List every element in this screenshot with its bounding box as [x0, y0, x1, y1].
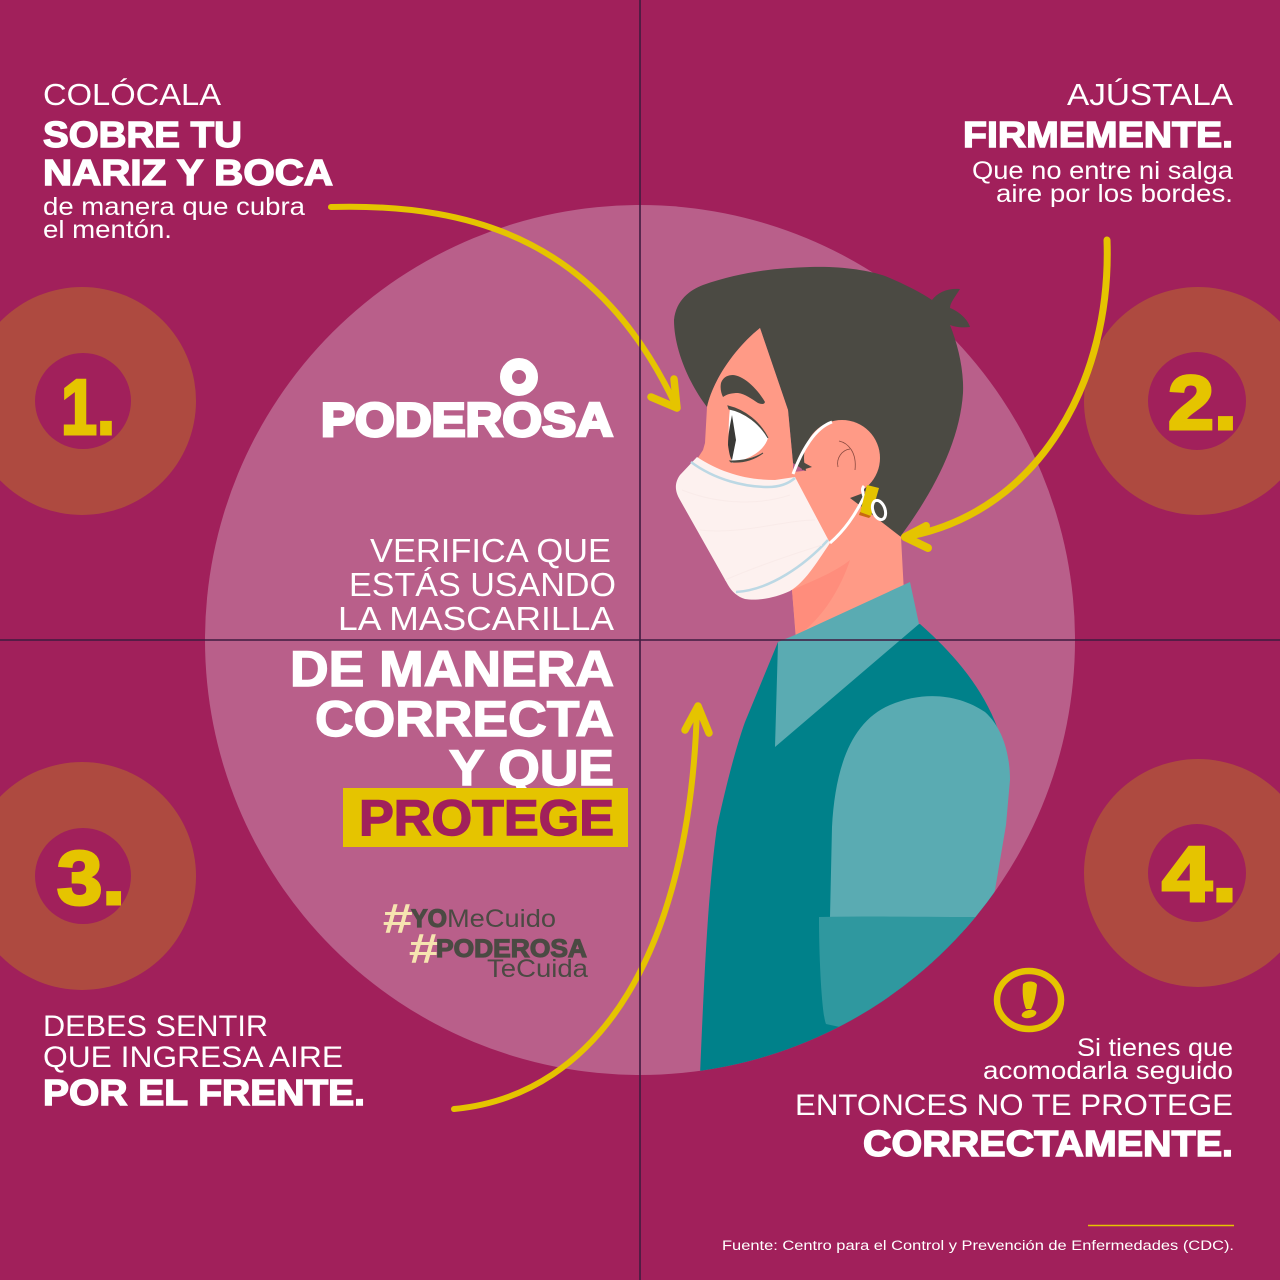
badge: step 4 [1084, 759, 1280, 987]
central message: PROTEGE [359, 790, 614, 846]
pocket [819, 916, 976, 1027]
arrow: upward to mask front [454, 706, 709, 1109]
text block: step 2: AJÚSTALA [1067, 77, 1233, 112]
shirt torso [700, 624, 1010, 1100]
text block: step 4: ENTONCES NO TE PROTEGE [795, 1089, 1233, 1122]
badge: step 3: 3. [57, 836, 125, 921]
text block: step 1: el mentón. [43, 216, 172, 244]
arrow: to back of neck [905, 240, 1107, 548]
hashtags: # [382, 895, 413, 942]
eye [728, 406, 768, 463]
text block: step 3: POR EL FRENTE. [43, 1072, 365, 1113]
text block: step 3 [43, 1010, 365, 1113]
text block: step 2: FIRMEMENTE. [963, 114, 1233, 155]
text block: step 1 [43, 77, 333, 244]
text block: step 1: de manera que cubra [43, 193, 305, 221]
text block: step 2: aire por los bordes. [996, 180, 1233, 208]
text block: step 3: QUE INGRESA AIRE [43, 1041, 343, 1074]
text block: step 4: Si tienes que [1077, 1034, 1233, 1062]
central message: VERIFICA QUE [370, 532, 611, 569]
hashtags: MeCuido [447, 905, 556, 933]
central message: Y QUE [449, 740, 614, 796]
mask [676, 457, 830, 600]
text block: step 1: NARIZ Y BOCA [43, 152, 333, 193]
hashtags: # [408, 925, 439, 972]
central circle [205, 205, 1075, 1075]
central message [290, 532, 628, 847]
text block: step 4: CORRECTAMENTE. [863, 1123, 1233, 1164]
ear [801, 420, 880, 496]
sleeve [830, 696, 1010, 930]
central message: CORRECTA [315, 691, 614, 747]
text block: step 2 [963, 77, 1233, 208]
eyebrow [721, 375, 765, 404]
icon: exclamation [997, 971, 1061, 1029]
text block: step 4 [795, 1034, 1233, 1164]
neck shadow [792, 560, 850, 636]
arrow: to nose [331, 207, 677, 408]
central message: LA MASCARILLA [338, 600, 614, 637]
badge: step 2: 2. [1168, 361, 1237, 446]
text block: step 3: DEBES SENTIR [43, 1010, 268, 1043]
mask clip [859, 485, 888, 521]
text block: step 1: COLÓCALA [43, 77, 221, 112]
logo: Poderosa: PODEROSA [321, 393, 613, 446]
hashtags [382, 895, 588, 983]
illustration: person wearing mask [674, 267, 1010, 1100]
neck and face skin [690, 328, 905, 640]
badge: step 4: 4. [1162, 830, 1237, 918]
central message: ESTÁS USANDO [349, 566, 616, 603]
badge: step 1 [0, 287, 196, 515]
badge: step 2 [1084, 287, 1280, 515]
text block: step 4: acomodarla seguido [983, 1057, 1233, 1085]
source note: Fuente: Centro para el Control y Prevención de Enfermedades (CDC). [722, 1238, 1234, 1253]
text block: step 2: Que no entre ni salga [972, 157, 1233, 185]
mask ear loop [793, 422, 864, 543]
badge: step 3 [0, 762, 196, 990]
text block: step 1: SOBRE TU [43, 114, 242, 155]
hair [674, 267, 970, 537]
hashtags: YO [411, 905, 447, 933]
central message: DE MANERA [290, 641, 614, 697]
hashtags: PODEROSA [436, 935, 587, 963]
logo: Poderosa [321, 364, 613, 446]
collar [775, 582, 919, 747]
hashtags: TeCuida [487, 955, 588, 983]
badge: step 1: 1. [61, 363, 115, 451]
